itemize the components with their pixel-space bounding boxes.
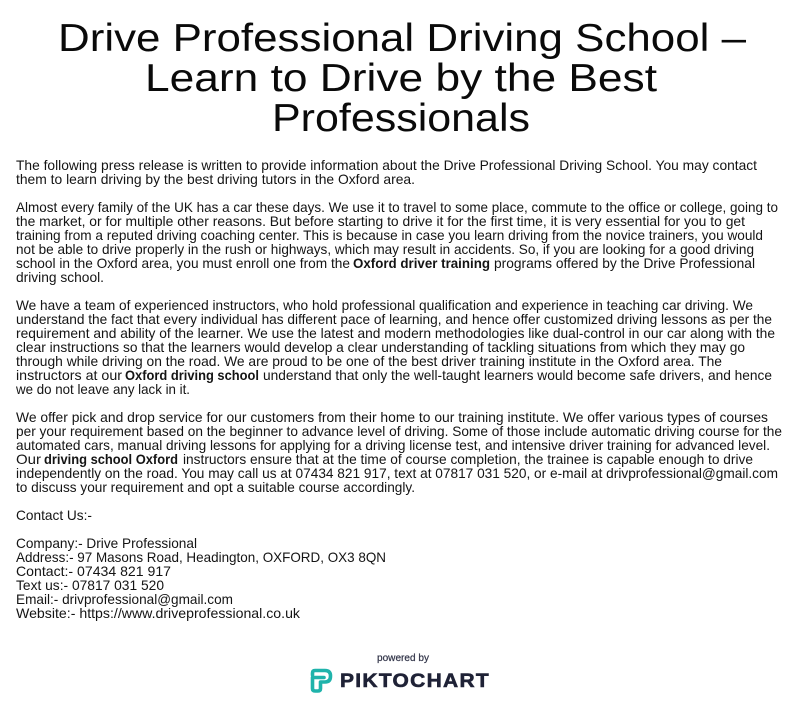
text block: why driver training matters: driving school. bbox=[16, 269, 104, 285]
text block: contact details bbox=[16, 535, 386, 621]
text block: contact details: Company:- Drive Professional bbox=[16, 535, 197, 551]
text block: contact details: Contact:- 07434 821 917 bbox=[16, 563, 171, 579]
title: Drive Professional Driving School – bbox=[58, 17, 746, 60]
text block: why driver training matters: not be able to drive properly in the rush or highways, which may result in accidents. So, if you are looking for a good driving bbox=[16, 241, 754, 257]
footer: piktochart branding bbox=[312, 652, 490, 692]
icon: piktochart logo bbox=[312, 670, 330, 691]
text block: services: per your requirement based on the beginner to advance level of driving. Some of those include automatic driving course for the bbox=[16, 423, 782, 439]
text block: contact details: Website:- https://www.driveprofessional.co.uk bbox=[16, 605, 301, 621]
text block: why driver training matters bbox=[16, 199, 778, 285]
text block: why driver training matters: Almost every family of the UK has a car these days. We use it to travel to some place, commute to the office or college, going to bbox=[16, 199, 778, 215]
text block: introduction: them to learn driving by the best driving tutors in the Oxford area. bbox=[16, 171, 415, 187]
text block: why driver training matters: school in the Oxford area, you must enroll one from the bbox=[16, 255, 350, 271]
text block: contact details: Address:- 97 Masons Road, Headington, OXFORD, OX3 8QN bbox=[16, 549, 386, 565]
text block: instructors: requirement and ability of the learner. We use the latest and modern methodologies like dual-control in our car along with the bbox=[16, 325, 775, 341]
text block: services: automated cars, manual driving lessons for applying for a driving license test, and intensive driver training for advanced level. bbox=[16, 437, 770, 453]
text block: services: We offer pick and drop service for our customers from their home to our training institute. We offer various types of courses bbox=[16, 409, 768, 425]
text block: instructors: Oxford driving school bbox=[125, 367, 259, 383]
title: Learn to Drive by the Best bbox=[145, 57, 657, 100]
heading: contact us: Contact Us:- bbox=[16, 507, 92, 523]
text block: introduction: The following press release is written to provide information about the Drive Professional Driving School. You may contact bbox=[16, 157, 757, 173]
text block: services: to discuss your requirement and opt a suitable course accordingly. bbox=[16, 479, 415, 495]
text block: instructors bbox=[15, 297, 775, 397]
text block: contact details: Email:- drivprofessional@gmail.com bbox=[16, 591, 233, 607]
text block: why driver training matters: programs offered by the Drive Professional bbox=[494, 255, 755, 271]
text block: services: driving school Oxford bbox=[44, 451, 178, 467]
title bbox=[58, 17, 746, 140]
text block: contact details: Text us:- 07817 031 520 bbox=[16, 577, 164, 593]
text block: services: independently on the road. You may call us at 07434 821 917, text at 07817 031 520, or e-mail at drivprofessional@gmail.com bbox=[16, 465, 778, 481]
text block: services: Our bbox=[16, 451, 41, 467]
title: Professionals bbox=[272, 97, 530, 140]
text block: instructors: clear instructions so that the learners would develop a clear understanding of tackling situations from which they may go bbox=[16, 339, 745, 355]
text block: services: instructors ensure that at the time of course completion, the trainee is capable enough to drive bbox=[183, 451, 753, 467]
text block: why driver training matters: the market, or for multiple other reasons. But before starting to drive it for the first time, it is very essential for you to get bbox=[16, 213, 745, 229]
text block: instructors: we do not leave any lack in it. bbox=[15, 381, 190, 397]
text block: instructors: understand the fact that every individual has different pace of learning, and hence offer customized driving lessons as per the bbox=[16, 311, 772, 327]
text block: instructors: instructors at our bbox=[16, 367, 122, 383]
text block: why driver training matters: training from a reputed driving coaching center. This is because in case you learn driving from the novice trainers, you would bbox=[16, 227, 763, 243]
text block: instructors: We have a team of experienced instructors, who hold professional qualification and experience in teaching car driving. We bbox=[16, 297, 753, 313]
powered by label: powered by bbox=[377, 652, 430, 664]
text block: instructors: through while driving on the road. We are proud to be one of the best driver training institute in the Oxford area. The bbox=[16, 353, 722, 369]
wordmark: PIKTOCHART bbox=[340, 670, 490, 692]
text block: introduction bbox=[16, 157, 757, 187]
text block: why driver training matters: Oxford driver training bbox=[353, 255, 490, 271]
text block: instructors: understand that only the well-taught learners would become safe drivers, and hence bbox=[263, 367, 772, 383]
text block: services bbox=[16, 409, 782, 495]
